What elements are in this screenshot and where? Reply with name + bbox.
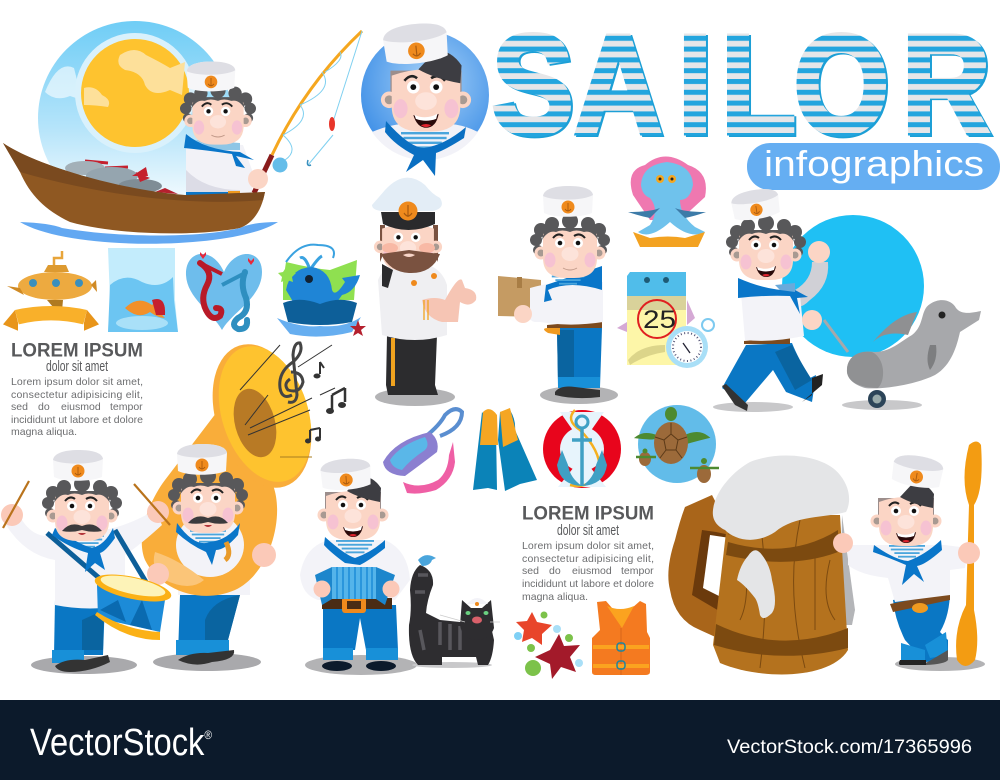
text block: left <box>11 340 143 438</box>
text block: lower middle: tempor <box>621 565 654 577</box>
diving mask and snorkel icon <box>383 409 462 494</box>
mug handle <box>668 495 730 640</box>
starfish icon <box>514 612 583 679</box>
accordion sailor <box>300 457 417 675</box>
stopwatch <box>666 319 714 368</box>
sky and sun <box>38 21 232 215</box>
text block: left: eiusmod <box>61 401 101 413</box>
submarine icon <box>3 251 99 331</box>
tuba sailor legs <box>176 580 250 665</box>
text block: left: Lorem ipsum dolor sit amet, <box>11 376 143 388</box>
title: SAILOR: SAILOR <box>492 6 991 164</box>
drum <box>93 569 173 640</box>
blue circle <box>782 215 924 357</box>
whale icon <box>277 245 366 337</box>
text block: left: tempor <box>110 401 143 413</box>
text block: lower middle <box>522 504 654 603</box>
text block: lower middle: do <box>549 565 561 577</box>
portrait badge <box>361 21 489 176</box>
box sailor <box>498 186 618 404</box>
accordion <box>315 567 395 605</box>
subtitle pill: infographics: infographics <box>764 143 984 184</box>
fishing scene <box>3 21 362 244</box>
text block: lower middle: Lorem ipsum dolor sit amet, <box>522 540 654 552</box>
fish catch <box>65 161 178 194</box>
water bag with goldfish icon <box>108 248 178 332</box>
beer mug <box>668 456 855 674</box>
text block: lower middle: LOREM IPSUM <box>522 504 654 524</box>
text block: left: do <box>38 401 50 413</box>
text block: left: consectetur adipisicing elit, <box>11 389 143 401</box>
text block: left: sed <box>11 401 28 413</box>
watermark logo: VectorStock <box>30 722 233 764</box>
lifebuoy with anchor icon <box>543 410 621 488</box>
text block: lower middle: incididunt ut labore et dolore <box>522 578 654 590</box>
cardboard box <box>498 276 541 317</box>
text block: left: incididunt ut labore et dolore <box>11 414 143 426</box>
sea turtles icon <box>636 405 719 483</box>
cat with bird <box>409 555 500 668</box>
text block: left: magna aliqua. <box>11 426 77 438</box>
seahorses in heart icon <box>186 252 262 330</box>
watermark logo: ® <box>204 728 212 742</box>
paddle <box>956 442 982 666</box>
text block: left: dolor sit amet <box>46 358 109 375</box>
subtitle pill: infographics <box>747 143 1000 190</box>
mug body <box>713 515 848 674</box>
music notes <box>240 343 346 444</box>
paddle sailor <box>833 442 985 671</box>
calendar 25 icon: 25 <box>643 306 676 334</box>
tuba bell and ring <box>142 331 329 596</box>
footer bar <box>0 700 1000 780</box>
captain <box>372 178 476 406</box>
text block: lower middle: consectetur adipisicing elit, <box>522 553 654 565</box>
text block: lower middle: sed <box>522 565 539 577</box>
calendar 25 icon <box>617 272 714 368</box>
walking sailor with dolphin <box>713 186 981 412</box>
title: SAILOR: SAILOR <box>494 8 993 165</box>
fisherman <box>180 62 256 198</box>
text block: lower middle: dolor sit amet <box>557 522 620 539</box>
belt <box>322 598 392 609</box>
drummer <box>1 450 173 672</box>
dolphin on cart <box>824 300 981 408</box>
text block: lower middle: magna aliqua. <box>522 591 588 603</box>
fishing rod <box>248 31 362 193</box>
beer foam <box>713 456 849 618</box>
text block: lower middle: eiusmod <box>572 565 612 577</box>
water <box>20 222 278 244</box>
text block: left: LOREM IPSUM <box>11 340 143 362</box>
image id: VectorStock.com/17365996 <box>727 737 972 758</box>
swim fins icon <box>473 408 537 491</box>
boat <box>3 143 265 233</box>
life vest icon <box>592 601 650 675</box>
tuba sailor <box>147 444 276 585</box>
tuba and drummer band <box>1 331 346 674</box>
octopus in shell icon <box>628 156 706 247</box>
